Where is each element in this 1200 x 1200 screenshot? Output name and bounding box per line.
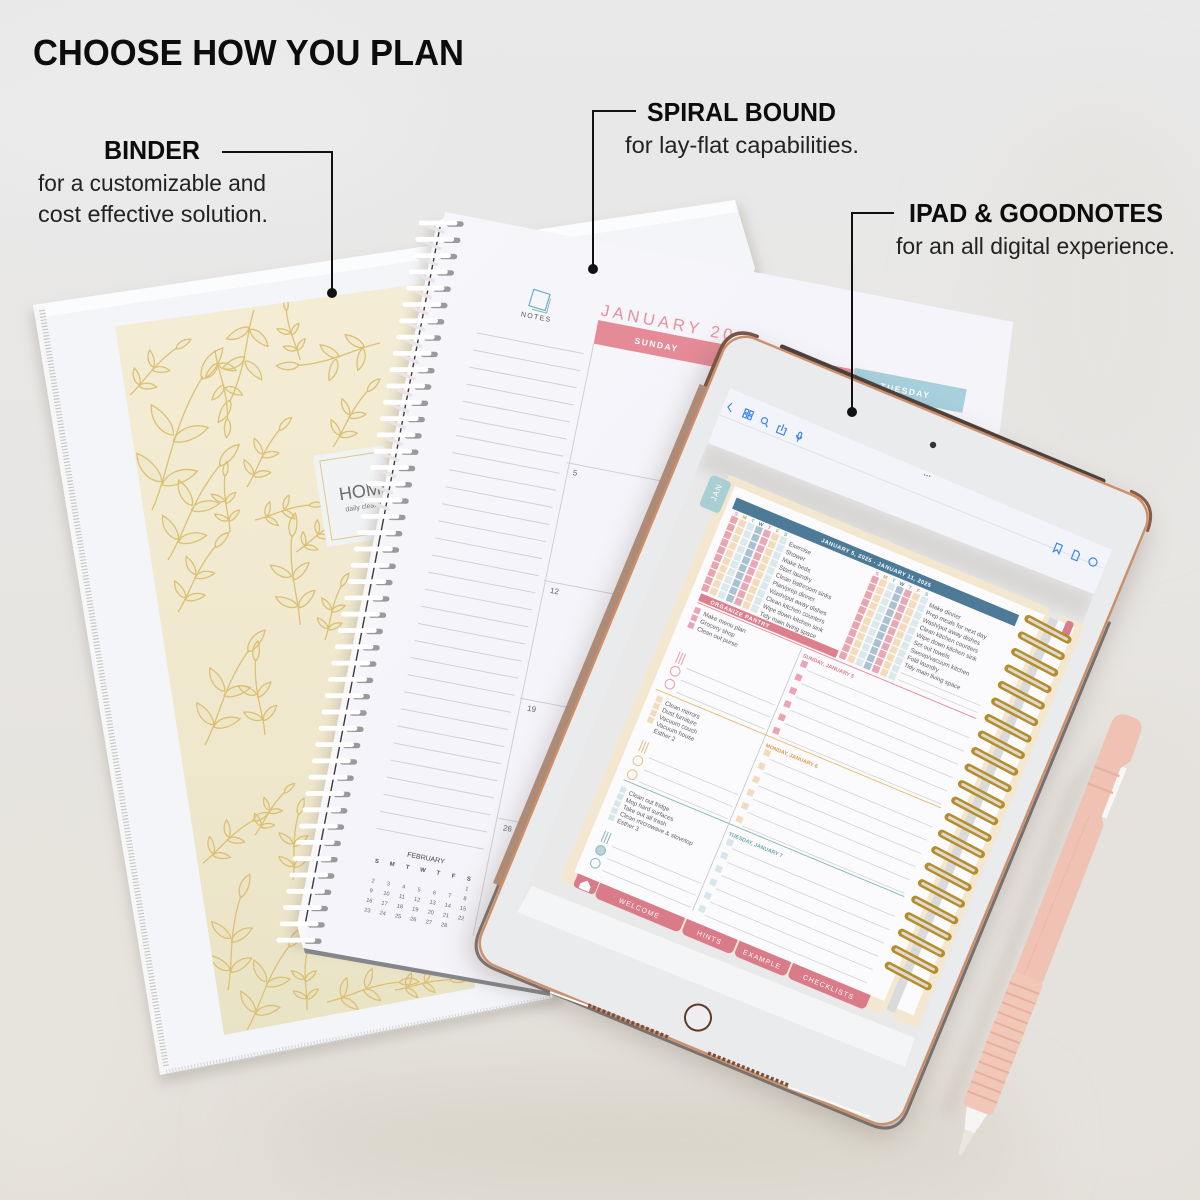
pencil clip — [1098, 765, 1127, 819]
pink tab right edge — [1059, 620, 1074, 641]
binder top rim — [33, 200, 738, 318]
ipad — [460, 323, 1160, 1143]
sunday label: SUNDAY — [634, 335, 680, 354]
habit list 2: Sweep/vacuum kitchen — [909, 647, 971, 678]
february mini calendar: 17 — [381, 901, 388, 908]
callout: spiral bound: for lay-flat capabilities. — [625, 132, 859, 158]
habit grid 1 weekdays: T — [750, 518, 755, 525]
habit grid 1 weekdays: S — [733, 511, 739, 518]
case bottom studs — [550, 992, 870, 1117]
multitasking dots — [924, 475, 930, 476]
binder body — [33, 200, 755, 1075]
february mini calendar: 18 — [396, 904, 403, 911]
callout: binder — [38, 135, 268, 227]
left column: pantry list — [687, 607, 747, 650]
february mini calendar: 11 — [398, 894, 405, 901]
binder cover label: HOME — [338, 476, 394, 504]
right page strip — [897, 621, 1075, 1015]
callout: ipad and goodnotes: for an all digital experience. — [896, 233, 1175, 259]
notes ruled lines — [377, 332, 584, 850]
binding gutter — [882, 615, 1050, 1009]
left column: tasks monday: Esther 2 — [652, 728, 677, 743]
february mini calendar: S — [466, 876, 471, 883]
tab: example — [733, 935, 794, 977]
spine strip — [297, 214, 450, 948]
callout: ipad and goodnotes: IPAD & GOODNOTES — [909, 198, 1163, 228]
tablet face — [472, 329, 1155, 1132]
bottom white strip — [517, 886, 915, 1067]
february mini calendar: 5 — [417, 887, 421, 894]
binder — [30, 200, 760, 1084]
spiral bound planner — [279, 212, 1013, 1008]
february mini calendar: 12 — [413, 897, 421, 904]
tab labels: HINTS — [696, 930, 723, 947]
february mini calendar: 2 — [371, 878, 375, 885]
week banner — [732, 498, 1019, 626]
pencil rings — [1088, 767, 1119, 793]
february mini calendar: FEBRUARY — [407, 852, 445, 866]
left column: tasks monday: Vacuum couch — [658, 714, 699, 736]
february mini calendar: 14 — [444, 903, 451, 910]
february mini calendar: 28 — [440, 922, 448, 929]
habit list 2 blank lines — [898, 673, 980, 713]
habit grid 1 weekdays: M — [741, 514, 747, 522]
day: sunday: SUNDAY, JANUARY 5 — [802, 653, 855, 680]
february mini calendar: 9 — [369, 888, 373, 895]
february mini calendar: 7 — [447, 893, 452, 900]
left column: pantry list: Make menu plan — [702, 611, 747, 635]
date numbers: 19 — [526, 704, 537, 714]
habit list 2: Tidy main living space — [903, 662, 962, 692]
month tab jan: JAN — [709, 482, 724, 502]
habit grid 1 weekdays: W — [757, 521, 764, 529]
february mini calendar: 22 — [457, 915, 465, 922]
left column: pantry list: Grocery shop — [699, 618, 736, 639]
february mini calendar — [364, 846, 475, 932]
navigation tabs — [572, 868, 873, 1010]
left column: tasks tuesday: Clean out fridge — [627, 790, 671, 814]
left column: tasks tuesday: Take out all trash — [622, 804, 668, 829]
cream page back — [560, 475, 1050, 1014]
february mini calendar: 19 — [412, 907, 419, 914]
callout: spiral bound: SPIRAL BOUND — [647, 97, 836, 127]
habit list 2 — [903, 602, 992, 694]
section rules — [583, 601, 978, 983]
callout: binder: cost effective solution. — [38, 201, 268, 227]
left column: tasks monday: Clean mirrors — [664, 700, 701, 721]
pencil tip — [959, 1106, 987, 1135]
tuesday label: TUESDAY — [879, 381, 931, 400]
habit list 1: Wash/put away dishes — [768, 587, 828, 618]
habit list 2: Fold laundry — [906, 654, 941, 674]
title: CHOOSE HOW YOU PLAN — [33, 32, 464, 73]
month tab jan — [699, 474, 732, 514]
habit list 1: Exercise — [787, 541, 813, 557]
callout: ipad and goodnotes — [896, 198, 1175, 259]
left column: meal icons 2 — [626, 740, 743, 819]
home button — [681, 1001, 715, 1035]
habit grid 2 weekdays: S — [874, 571, 880, 578]
day: tuesday — [696, 832, 901, 983]
leader line: spiral bound — [589, 111, 636, 273]
habit list 2: Set out towels — [912, 639, 951, 661]
callout: binder: for a customizable and — [38, 170, 266, 196]
screen — [517, 388, 1112, 1067]
left column: meal icons 1 — [663, 651, 780, 729]
february mini calendar: 26 — [410, 916, 417, 923]
page sheet — [303, 212, 1013, 992]
white page — [574, 486, 1045, 1001]
spiral coils — [279, 223, 461, 941]
habit grid 2 weekdays: T — [907, 585, 912, 591]
february mini calendar: 8 — [463, 896, 467, 903]
binder cover artwork — [115, 283, 475, 1039]
habit list 1 — [758, 541, 851, 642]
february mini calendar: 21 — [442, 912, 449, 920]
spine dark line — [305, 227, 440, 925]
habit list 1: Plan/prep dinner — [771, 580, 816, 604]
february mini calendar: T — [436, 870, 441, 877]
habit list 1: Wipe down kitchen sink — [762, 603, 825, 635]
february mini calendar: 20 — [427, 909, 434, 917]
february mini calendar: 10 — [383, 891, 390, 898]
icon: notes — [528, 289, 552, 313]
february mini calendar: 15 — [459, 906, 467, 913]
tab: welcome — [594, 877, 687, 933]
habit list 1: Start laundry — [778, 564, 814, 584]
toolbar — [708, 388, 1112, 594]
gold spiral coils — [883, 619, 1073, 986]
leader line: ipad — [848, 213, 894, 416]
february mini calendar: F — [451, 873, 456, 880]
binder ribbed spine — [39, 306, 552, 1072]
date numbers: 5 — [572, 468, 579, 478]
habit list 2: Wash/put away dishes — [922, 617, 981, 647]
habit list 1: Clean bathroom sinks — [775, 572, 832, 601]
day: sunday — [771, 653, 975, 804]
february mini calendar: 24 — [379, 910, 386, 917]
habit grid 1 weekdays: S — [783, 532, 789, 539]
february mini calendar: S — [374, 859, 379, 865]
left column: pantry list: Clean out purse — [696, 626, 739, 649]
habit grid 1 weekdays: F — [775, 528, 780, 535]
habit list 1: Shower — [784, 549, 806, 563]
left column: tasks tuesday: Mop hard surfaces — [625, 797, 675, 823]
february mini calendar: T — [405, 865, 410, 871]
left column: tasks tuesday: Esther 3 — [616, 818, 640, 833]
february mini calendar: 3 — [386, 881, 390, 888]
habit grid 2 weekdays: M — [882, 574, 888, 581]
habit list 2: Make dinner — [928, 602, 962, 622]
back cover edge — [303, 946, 550, 996]
february mini calendar: 16 — [366, 898, 373, 905]
callout: spiral bound — [625, 97, 859, 158]
day: monday: MONDAY, JANUARY 6 — [764, 743, 819, 770]
habit list 2: Clean kitchen counters — [918, 624, 979, 655]
spiral shadow — [290, 225, 1000, 985]
february mini calendar: W — [419, 867, 426, 874]
february mini calendar: 13 — [429, 900, 436, 907]
habit list 2: Prep meals for next day — [925, 609, 988, 641]
binder cover label: daily cleaning — [345, 500, 388, 514]
tab labels — [579, 879, 856, 1002]
tab: hints — [681, 913, 740, 955]
digital planner page — [544, 469, 1085, 1031]
habit grid 2 weekdays — [874, 571, 930, 599]
date numbers: 12 — [549, 586, 560, 597]
organize pantry banner: ORGANIZE PANTRY — [709, 600, 770, 630]
tablet case edges — [468, 325, 1159, 1136]
camera — [929, 441, 937, 449]
habit list 2: Wipe down kitchen sink — [915, 632, 979, 664]
habit grid 1 weekdays — [733, 511, 789, 539]
habit list 1: Clean kitchen counters — [765, 595, 826, 626]
date numbers: 26 — [502, 823, 513, 834]
left column: tasks tuesday — [607, 786, 703, 855]
tablet shadow — [461, 336, 1155, 1143]
february mini calendar: M — [389, 861, 395, 868]
callout: binder: BINDER — [104, 135, 200, 165]
calendar grid — [473, 343, 819, 980]
month heading: JANUARY 20 — [599, 302, 738, 345]
habit grid 2 weekdays: T — [891, 578, 896, 585]
habit grid 1 — [702, 519, 786, 610]
notes label: NOTES — [520, 311, 552, 324]
february mini calendar: 23 — [364, 907, 371, 915]
marble band on screen — [696, 443, 1094, 620]
tab: home — [573, 868, 602, 895]
habit list 1: Make beds — [781, 556, 812, 575]
apple pencil — [940, 710, 1146, 1161]
leather band — [493, 384, 708, 886]
february mini calendar: 4 — [402, 884, 406, 891]
left column: tasks monday — [643, 696, 705, 750]
day: monday — [734, 743, 937, 893]
february mini calendar: 25 — [394, 913, 402, 920]
pencil shadow — [940, 730, 1110, 1120]
february mini calendar: 6 — [432, 890, 436, 897]
pencil ribbed grip — [962, 971, 1044, 1116]
habit grid 2 — [840, 579, 927, 677]
february mini calendar: 1 — [465, 886, 469, 893]
week title: JANUARY 5, 2025 - JANUARY 11, 2025 — [820, 538, 932, 589]
organize pantry banner — [698, 593, 839, 658]
habit grid 2 weekdays: W — [898, 581, 905, 588]
toolbar icons — [728, 403, 1098, 567]
tuesday header — [850, 368, 967, 413]
february mini calendar: 27 — [425, 919, 432, 926]
tab labels: CHECKLISTS — [802, 974, 855, 1002]
tab labels: WELCOME — [617, 897, 661, 921]
day: tuesday: TUESDAY, JANUARY 7 — [728, 832, 783, 859]
habit grid 1 weekdays: T — [766, 525, 772, 532]
date numbers — [502, 468, 583, 834]
left column: tasks monday: Dust furniture — [661, 707, 698, 728]
left column: tasks monday: Vacuum house — [655, 721, 696, 743]
leader line: binder — [222, 152, 336, 297]
habit grid 2 weekdays: S — [924, 591, 930, 599]
binder cover label — [313, 445, 402, 547]
sunday header — [594, 320, 854, 393]
pencil body — [1015, 711, 1146, 983]
habit grid 2 weekdays: F — [915, 588, 921, 595]
left column: tasks tuesday: Clean microwave & stovetop — [619, 811, 694, 848]
habit list 1: Tidy main living space — [758, 611, 818, 641]
tab labels: EXAMPLE — [742, 949, 782, 971]
tab: checklists — [787, 957, 873, 1010]
left column: meal icons 3 — [589, 830, 705, 908]
